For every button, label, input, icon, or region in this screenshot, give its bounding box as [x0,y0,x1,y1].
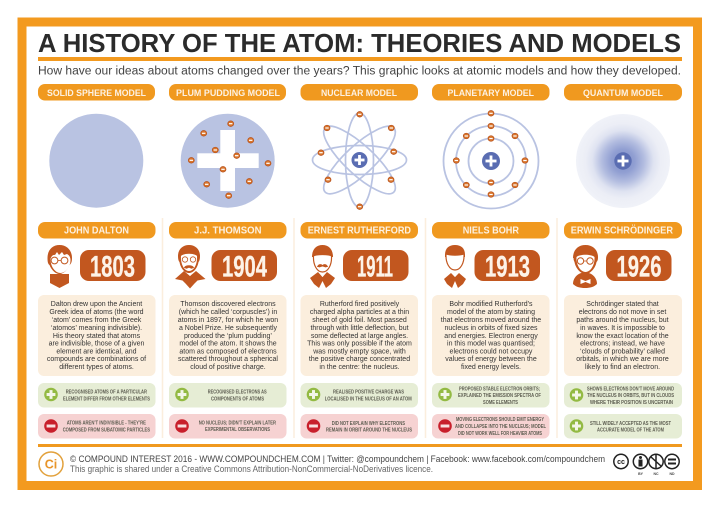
title underline [38,57,682,61]
text panel: Schrödinger: in waves. It is impossible to [580,325,665,332]
pro: Schrödinger 1: SHOWS ELECTRONS DON’T MOVE AROUND [587,386,674,392]
icons: Creative Commons licence: BY [638,472,644,476]
con: Rutherford: REMAIN IN ORBIT AROUND THE NUCLEUS [326,428,413,434]
text panel: Schrödinger: orbitals, in which we are more [576,356,669,363]
con: Bohr: DID NOT WORK WELL FOR HEAVIER ATOMS [458,431,543,437]
heading: plum pudding model [169,84,286,100]
diagram: solid sphere [49,114,143,208]
con: Bohr [432,414,550,438]
text panel: Rutherford: This was only possible if the atom [307,340,412,348]
text panel: Rutherford: through with little deflection, but [310,325,409,332]
icon: Dalton portrait [48,245,72,288]
icon: Schrödinger portrait [573,245,598,288]
heading: quantum model: QUANTUM MODEL [583,88,663,99]
text panel: Schrödinger: paths around the nucleus, but [576,317,669,324]
text panel: Schrödinger: electrons; instead, we have [580,340,665,348]
name: Ernest Rutherford: ERNEST RUTHERFORD [308,225,411,237]
con: Dalton: COMPOSED FROM SUBATOMIC PARTICLES [63,428,151,434]
con: Bohr: MOVING ELECTRONS SHOULD EMIT ENERGY [456,417,545,423]
heading: solid sphere model: SOLID SPHERE MODEL [47,88,146,99]
diagram: nuclear [312,112,406,210]
text panel: Thomson: a Nobel Prize. He subsequently [179,325,278,332]
heading: planetary model: PLANETARY MODEL [448,88,534,99]
logo: Compound Interest: Ci [45,458,57,472]
con: Bohr: AND COLLAPSE INTO THE NUCLEUS; MODEL [455,424,546,430]
year: 1911 [343,250,408,284]
pro: Schrödinger 2: STILL WIDELY ACCEPTED AS THE MOST [590,421,671,427]
text panel: Bohr: and energies. Electron energy [444,333,538,340]
text panel: Thomson: (which he called ‘corpuscles’) in [179,309,277,316]
icons: Creative Commons licence: cc [617,459,625,466]
text panel: Schrödinger [564,295,682,376]
icons: Creative Commons licence: NC [653,472,659,476]
pro: Bohr: EXPLAINED THE EMISSION SPECTRA OF [458,393,541,399]
text panel: Thomson: produced the ‘plum pudding’ [184,333,272,340]
year: 1803: 1803 [90,250,135,284]
text panel: Dalton [38,295,156,376]
heading: nuclear model: NUCLEAR MODEL [321,88,397,99]
text panel: Bohr: that electrons moved around the [441,317,541,324]
text panel: Schrödinger: Schrödinger stated that [586,301,659,308]
name: Erwin Schrödinger: ERWIN SCHRÖDINGER [571,224,673,237]
pro: Rutherford: REALISED POSITIVE CHARGE WAS [333,390,405,396]
pro: Dalton: ELEMENT DIFFER FROM OTHER ELEMENTS [63,396,151,402]
text panel: Dalton: element are identical, and [56,348,137,356]
text panel: Rutherford [300,295,418,376]
pro: Bohr: SOME ELEMENTS [483,400,519,406]
name: Erwin Schrödinger [564,222,682,238]
text panel: Thomson: scattered throughout a spherical [178,356,278,363]
text panel: Dalton: ‘atomos’ meaning indivisible). [51,325,142,332]
text panel: Bohr: values of energy between the [445,356,537,363]
text panel: Rutherford: some deflected at large angles. [311,333,408,340]
pro: Dalton [38,383,156,408]
year: 1911: 1911 [357,250,393,284]
text panel: Rutherford: the positive charge concentrated [309,356,410,363]
year: 1926: 1926 [616,250,662,284]
logo: Compound Interest [39,452,63,476]
text panel: Bohr: in this model was quantised; [447,340,535,348]
pro: Thomson: COMPONENTS OF ATOMS [211,396,265,402]
diagram: planetary [444,110,538,208]
diagram: plum pudding [181,114,275,208]
con: Rutherford: DID NOT EXPLAIN WHY ELECTRONS [332,421,406,427]
pro: Thomson [169,383,286,408]
pro: Bohr [432,383,550,408]
text panel: Thomson: atom as composed of electrons [179,348,277,356]
text panel: Bohr: Bohr modified Rutherford’s [449,301,533,308]
text panel: Dalton: Greek idea of atoms (the word [49,309,144,316]
name: Niels Bohr: NIELS BOHR [463,225,519,237]
year: 1904: 1904 [222,250,267,284]
pro: Schrödinger 1: THE NUCLEUS IN ORBITS, BUT IN CLOUDS [587,393,675,399]
name: Ernest Rutherford [300,222,418,238]
text panel: Bohr [432,295,550,376]
text panel: Schrödinger: likely to find an electron. [585,364,660,371]
text panel: Dalton: different types of atoms. [59,364,134,371]
pro: Schrödinger 1: WHERE THEIR POSITION IS UNCERTAIN [590,400,673,406]
text panel: Rutherford: in the centre: the nucleus. [319,364,400,371]
pro: Schrödinger 2: ACCURATE MODEL OF THE ATOM [597,428,664,434]
text panel: Thomson: atoms in 1897, for which he won [178,317,278,324]
footer rule [38,444,682,447]
pro: Rutherford: LOCALISED IN THE NUCLEUS OF AN ATOM [325,396,412,402]
text panel: Schrödinger: ‘clouds of probability’ called [580,348,665,356]
footer text [70,454,605,475]
icon: Rutherford portrait [310,245,335,288]
name: Niels Bohr [432,222,550,238]
text panel: Dalton: Dalton drew upon the Ancient [51,301,142,308]
text panel: Schrödinger: know the exact location of the [576,333,669,340]
name: John Dalton: JOHN DALTON [64,225,129,237]
text panel: Dalton: are indivisible, those of a given [49,340,144,348]
icons: Creative Commons licence [614,454,679,476]
text panel: Bohr: model of the atom by stating [447,309,535,316]
pro: Schrödinger 2 [564,414,682,438]
con: Thomson: EXPERIMENTAL OBSERVATIONS [205,427,271,433]
text panel: Bohr: nucleus in orbits of fixed sizes [444,325,538,332]
text panel: Thomson: cloud of positive charge. [190,364,266,371]
icons: Creative Commons licence: ND [669,472,675,476]
heading: quantum model [564,84,682,100]
name: J.J. Thomson: J.J. THOMSON [194,225,262,237]
con: Rutherford [300,414,418,438]
heading: nuclear model [300,84,418,100]
pro: Rutherford [300,383,418,408]
text panel: Rutherford: sheet of gold foil. Most passed [312,317,407,324]
title: A HISTORY OF THE ATOM: THEORIES AND MODELS [38,30,681,58]
pro: Bohr: PROPOSED STABLE ELECTRON ORBITS; [459,386,540,392]
text panel: Thomson [169,295,286,376]
text panel: Rutherford: Rutherford fired positively [320,301,400,308]
text panel: Dalton: His theory stated that atoms [53,333,141,340]
pro: Schrödinger 1 [564,383,682,408]
year: 1913: 1913 [485,250,530,284]
text panel: Thomson: Thomson discovered electrons [180,301,276,308]
icon: Bohr portrait [444,245,466,288]
text panel: Rutherford: charged alpha particles at a thin [310,309,409,316]
con: Dalton: ATOMS AREN’T INDIVISIBLE - THEY’RE [67,421,147,427]
con: Thomson [169,414,286,438]
text panel: Dalton: ‘atom’ comes from the Greek [52,317,142,324]
footer text: © COMPOUND INTEREST 2016 - WWW.COMPOUNDCHEM.COM | Twitter: @compoundchem | Facebook: www.facebook.com/compoundchem [70,454,605,465]
text panel: Bohr: electrons could not occupy [450,348,533,356]
pro: Thomson: RECOGNISED ELECTRONS AS [208,390,267,396]
pro: Dalton: RECOGNISED ATOMS OF A PARTICULAR [66,390,147,396]
heading: planetary model [432,84,550,100]
heading: plum pudding model: PLUM PUDDING MODEL [176,88,280,99]
icon: Thomson portrait [175,245,206,288]
name: J.J. Thomson [169,222,286,238]
diagram: quantum [576,114,670,208]
name: John Dalton [38,222,156,238]
heading: solid sphere model [38,84,155,100]
text panel: Schrödinger: electrons do not move in set [579,309,666,316]
text panel: Dalton: compounds are combinations of [47,356,146,363]
footer text: This graphic is shared under a Creative Commons Attribution-NonCommercial-NoDerivatives licence. [70,464,433,475]
text panel: Rutherford: was mostly empty space, with [312,348,406,356]
text panel: Bohr: fixed energy levels. [461,364,521,371]
con: Thomson: NO NUCLEUS; DIDN’T EXPLAIN LATER [199,420,276,426]
text panel: Thomson: model of the atom. It shows the [179,340,277,348]
con: Dalton [38,414,156,438]
subtitle: How have our ideas about atoms changed over the years? This graphic looks at atomic models and how they developed. [38,66,681,78]
